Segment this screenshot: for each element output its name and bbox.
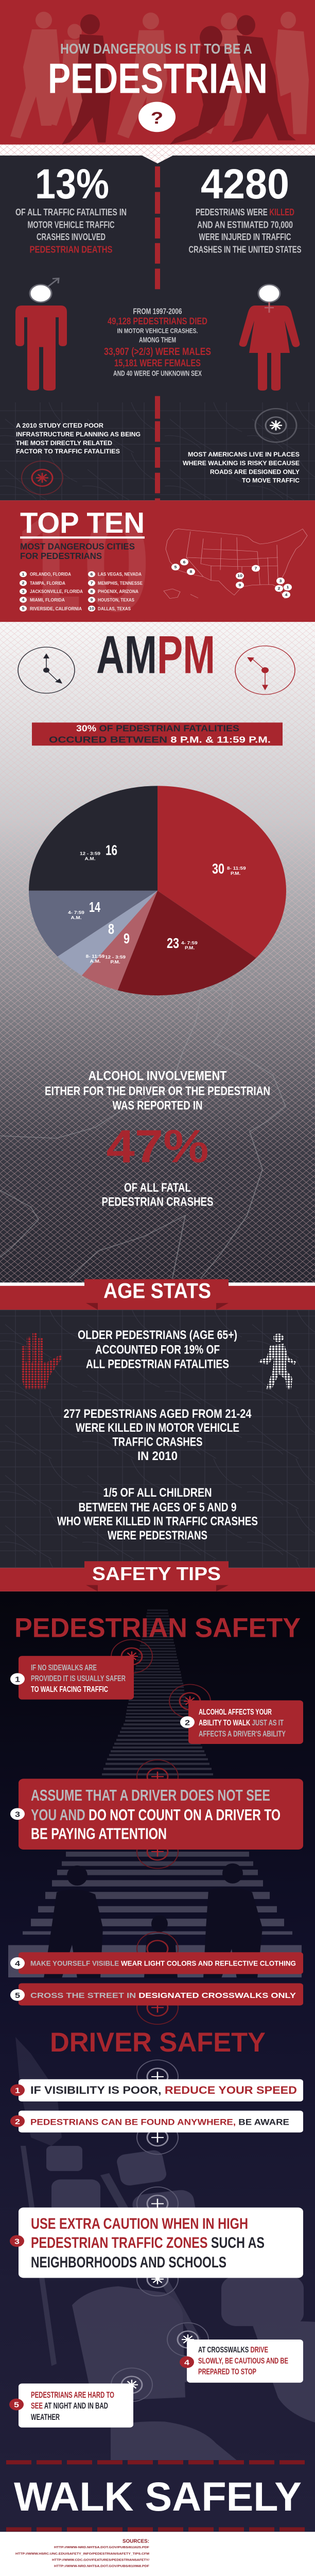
- text: 1997-2006 stats: IN MOTOR VEHICLE CRASHES.: [117, 328, 198, 335]
- us map: 2: [277, 586, 281, 590]
- city list: 10: [89, 606, 94, 611]
- driver tip 4: 4: [184, 2359, 190, 2367]
- panel: top ten: [0, 486, 315, 640]
- icon: white target: [255, 409, 296, 442]
- driver tip 5: SEE AT NIGHT AND IN BAD: [31, 2401, 108, 2411]
- heading: AMPM: PM: [157, 624, 215, 685]
- banner: age stats: AGE STATS: [103, 1279, 211, 1302]
- driver tip 5: PEDESTRIANS ARE HARD TO: [31, 2390, 114, 2400]
- stat: 13%: OF ALL TRAFFIC FATALITIES IN: [15, 207, 127, 218]
- sources footer: HTTP://WWW-NRD.NHTSA.DOT.GOV/PUBS/810968.PDF: [54, 2565, 149, 2568]
- icon: question mark: ?: [151, 109, 163, 127]
- text: most americans: TO MOVE TRAFFIC: [242, 477, 300, 484]
- stat: 13%: 13%: [35, 161, 109, 208]
- tip 3: [10, 1778, 303, 1850]
- text: 2010 study: THE MOST DIRECTLY RELATED: [16, 439, 112, 447]
- city list: 9: [90, 598, 93, 602]
- driver tip 5: 5: [14, 2401, 19, 2409]
- tip 5: CROSS THE STREET IN DESIGNATED CROSSWALKS ONLY: [30, 1991, 296, 2000]
- us map: [164, 529, 307, 599]
- dashed center line: [155, 166, 160, 500]
- heading: driver safety: DRIVER SAFETY: [50, 2027, 266, 2058]
- hero silhouettes: [10, 12, 309, 145]
- pie chart: P.M.: [185, 945, 195, 950]
- icon: red target: [22, 461, 63, 495]
- driver tip 1: [10, 2079, 303, 2102]
- pie chart: P.M.: [110, 960, 120, 964]
- banner: 30% fatalities: [32, 722, 283, 745]
- pie chart: 23: [167, 935, 179, 951]
- us map: 4: [285, 593, 288, 597]
- driver tip 4: PREPARED TO STOP: [198, 2367, 256, 2376]
- text: alcohol involvement: [45, 1068, 270, 1209]
- us map: 5: [174, 565, 177, 569]
- text: age stats: TRAFFIC CRASHES: [112, 1434, 202, 1449]
- subheading: FOR PEDESTRIANS: [20, 552, 102, 562]
- panel: key stats dark section: [0, 156, 315, 500]
- pie chart: 16: [106, 842, 117, 858]
- stat: 13%: [15, 161, 127, 255]
- text: alcohol involvement: PEDESTRIAN CRASHES: [102, 1195, 214, 1209]
- banner: age stats: [0, 1279, 315, 1310]
- sources footer: SOURCES:: [122, 2538, 149, 2544]
- driver tip 5: WEATHER: [31, 2412, 60, 2422]
- text: 1997-2006 stats: AND 40 WERE OF UNKNOWN SEX: [113, 369, 202, 378]
- cars silhouettes: [15, 2037, 315, 2460]
- text: age stats: [57, 1328, 258, 1542]
- stat: 4280: [188, 161, 302, 255]
- sources footer: HTTP://WWW-NRD.NHTSA.DOT.GOV/PUBS/811625.PDF: [54, 2546, 149, 2549]
- driver tip 3: [10, 2208, 303, 2278]
- city list: TAMPA, FLORIDA: [30, 581, 65, 586]
- text: alcohol involvement: ALCOHOL INVOLVEMENT: [88, 1068, 226, 1083]
- pie chart: 8: [108, 921, 114, 937]
- text: 1997-2006 stats: 49,128 PEDESTRIANS DIED: [108, 316, 207, 327]
- lattice band: [0, 145, 315, 156]
- city list: MIAMI, FLORIDA: [30, 598, 65, 603]
- pie chart: [29, 786, 286, 995]
- text: 1997-2006 stats: AMONG THEM: [139, 336, 176, 344]
- pie chart: 30: [212, 860, 224, 877]
- hero background: [0, 0, 315, 145]
- text: 1997-2006 stats: [104, 307, 211, 378]
- panel: top ten: 10: [14, 486, 151, 640]
- stat: 13%: MOTOR VEHICLE TRAFFIC: [28, 219, 115, 230]
- driver tip 2: PEDESTRIANS CAN BE FOUND ANYWHERE, BE AWARE: [30, 2117, 289, 2127]
- stat: 13%: CRASHES INVOLVED: [37, 232, 106, 243]
- tip 4: 4: [15, 1960, 21, 1968]
- city list: 8: [90, 589, 93, 594]
- city list: [20, 571, 143, 612]
- us map: 10: [237, 574, 242, 578]
- tip 4: [10, 1952, 303, 1974]
- icon: dotted hand: [21, 1333, 62, 1389]
- us map: 7: [254, 566, 257, 570]
- targets: driver section: [111, 2060, 208, 2401]
- us map: 3: [279, 579, 282, 583]
- city list: LAS VEGAS, NEVADA: [98, 572, 142, 577]
- city list: 2: [22, 581, 25, 585]
- red dashes top: [6, 2460, 305, 2464]
- city list: JACKSONVILLE, FLORIDA: [30, 589, 83, 595]
- city list: PHOENIX, ARIZONA: [98, 589, 138, 595]
- stat: 4280: 4280: [201, 161, 289, 208]
- text: 2010 study: INFRASTRUCTURE PLANNING AS BEING: [16, 431, 141, 438]
- city list: 6: [90, 572, 93, 577]
- driver tip 3: 3: [14, 2238, 20, 2246]
- sources footer: HTTP://WWW.CDC.GOV/FEATURES/PEDESTRIANSAFETY/: [52, 2558, 149, 2562]
- tip 1: [10, 1656, 134, 1700]
- tip 3: 3: [15, 1810, 20, 1819]
- text: alcohol involvement: WAS REPORTED IN: [112, 1098, 202, 1112]
- banner: 30% fatalities: OCCURED BETWEEN 8 P.M. & 11:59 P.M.: [49, 735, 271, 745]
- pedestrians silhouettes on crosswalk: [44, 1863, 262, 1978]
- pie chart: A.M.: [84, 856, 96, 861]
- text: 2010 study: FACTOR TO TRAFFIC FATALITIES: [16, 448, 120, 455]
- pie chart: 8- 11:59: [227, 866, 246, 871]
- city list: 4: [22, 598, 25, 602]
- tip 2: ABILITY TO WALK JUST AS IT: [199, 1718, 284, 1727]
- pie chart: 8- 11:59: [86, 954, 104, 959]
- text: age stats: 1/5 OF ALL CHILDREN: [103, 1485, 212, 1499]
- driver tip 1: IF VISIBILITY IS POOR, REDUCE YOUR SPEED: [30, 2084, 297, 2097]
- us map: 6: [183, 560, 186, 564]
- pie chart: P.M.: [231, 871, 240, 876]
- crosswalk: [8, 1609, 302, 1977]
- panel: age stats: [0, 1310, 315, 1568]
- tip 1: IF NO SIDEWALKS ARE: [31, 1663, 97, 1672]
- us map: 9: [238, 583, 241, 587]
- targets: pedestrian section: [111, 1639, 211, 2024]
- pie chart: 12 - 3:59: [105, 955, 126, 959]
- banner: safety tips: SAFETY TIPS: [92, 1564, 221, 1584]
- tip 5: 5: [15, 1991, 20, 2000]
- text: 1997-2006 stats: FROM 1997-2006: [133, 307, 182, 316]
- banner: 30% fatalities: 30% OF PEDESTRIAN FATALITIES: [76, 724, 239, 734]
- red dashes bottom: [6, 2527, 305, 2532]
- city list: 5: [22, 606, 25, 611]
- text: alcohol involvement: 47%: [106, 1121, 208, 1172]
- driver tip 5: [9, 2383, 133, 2428]
- city list: DALLAS, TEXAS: [98, 606, 131, 612]
- pie chart: A.M.: [71, 916, 82, 920]
- text: most americans: [183, 451, 300, 484]
- text: 1997-2006 stats: 33,907 (>2/3) WERE MALES: [104, 345, 211, 357]
- stat: 13%: PEDESTRIAN DEATHS: [29, 244, 113, 255]
- tip 2: [180, 1700, 303, 1744]
- tip 2: 2: [185, 1719, 190, 1727]
- text: age stats: ACCOUNTED FOR 19% OF: [95, 1342, 220, 1357]
- driver tip 2: 2: [15, 2117, 20, 2126]
- icon: female figure: [239, 284, 300, 391]
- subheading: [20, 542, 135, 562]
- icon: pm clock: [235, 646, 295, 694]
- icon: am clock: [18, 647, 75, 693]
- text: age stats: WERE PEDESTRIANS: [108, 1528, 207, 1542]
- tip 3: BE PAYING ATTENTION: [31, 1825, 167, 1843]
- text: 1997-2006 stats: 15,181 WERE FEMALES: [114, 357, 201, 368]
- pie chart: A.M.: [90, 959, 101, 963]
- tip 5: [10, 1983, 303, 2006]
- icon: dotted walker: [258, 1334, 296, 1389]
- pie chart: 4- 7:59: [181, 941, 198, 945]
- us map: 1: [286, 585, 289, 589]
- text: 2010 study: [16, 422, 141, 455]
- city list: 7: [90, 581, 93, 585]
- heading: top ten: TOP TEN: [20, 507, 145, 539]
- icon: question mark: [138, 102, 176, 132]
- city list: ORLANDO, FLORIDA: [30, 572, 71, 577]
- text: age stats: ALL PEDESTRIAN FATALITIES: [86, 1357, 229, 1371]
- text: 2010 study: A 2010 STUDY CITED POOR: [16, 422, 103, 429]
- tip 1: 1: [15, 1675, 20, 1684]
- text: alcohol involvement: OF ALL FATAL: [124, 1180, 191, 1194]
- pie chart: 12 - 3:59: [80, 851, 100, 856]
- driver tip 1: 1: [15, 2087, 20, 2095]
- city list: MEMPHIS, TENNESSE: [98, 581, 143, 586]
- icon: bottle outline: [0, 990, 286, 1278]
- pie chart: 14: [89, 899, 100, 915]
- us map: 8: [189, 570, 192, 574]
- heading: AMPM: AM: [96, 624, 157, 685]
- icon: male figure: [15, 278, 67, 391]
- banner: safety tips: [0, 1561, 315, 1591]
- sources footer: [0, 2532, 315, 2576]
- sources footer: HTTP://WWW.HSRC.UNC.EDU/SAFETY_INFO/PEDESTRIAN/SAFETY_TIPS.CFM: [15, 2552, 149, 2555]
- tip 1: PROVIDED IT IS USUALLY SAFER: [31, 1674, 126, 1683]
- driver tip 2: [10, 2111, 303, 2132]
- tip 1: TO WALK FACING TRAFFIC: [31, 1685, 108, 1694]
- driver tip 3: PEDESTRIAN TRAFFIC ZONES SUCH AS: [31, 2234, 265, 2251]
- text: age stats: IN 2010: [137, 1449, 178, 1463]
- city list: 3: [22, 589, 25, 594]
- city list: 1: [22, 572, 25, 577]
- subheading: MOST DANGEROUS CITIES: [20, 542, 135, 552]
- panel: safety background: [0, 1591, 315, 2532]
- city list: HOUSTON, TEXAS: [98, 598, 134, 603]
- pie chart: 4- 7:59: [68, 910, 84, 915]
- panel: am/pm background: [0, 622, 315, 1282]
- driver tip 4: AT CROSSWALKS DRIVE: [198, 2345, 268, 2354]
- driver tip 4: [180, 2340, 303, 2383]
- pie chart: 9: [124, 930, 130, 946]
- stat: 4280: PEDESTRIANS WERE KILLED: [196, 207, 294, 218]
- city list: RIVERSIDE, CALIFORNIA: [30, 606, 82, 612]
